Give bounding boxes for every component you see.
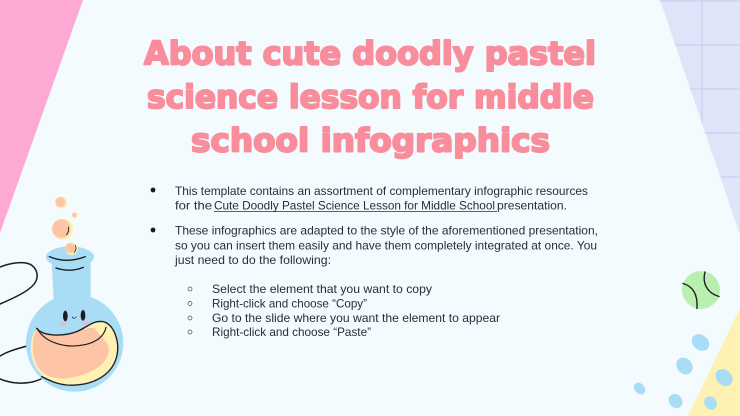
flask rim lines: [49, 257, 85, 270]
title: [144, 34, 596, 160]
lavender grid paper shape: [660, 0, 740, 235]
body text: first bullet: This template contains an assortment of complementary infographic resources: [175, 184, 588, 198]
icon: green tennis ball: [682, 271, 720, 309]
title: school infographics: [191, 122, 550, 160]
body text: sub-list of steps: [188, 282, 500, 339]
body text: sub-list of steps: Right-click and choose “Paste”: [212, 325, 371, 339]
body text: first bullet: Cute Doodly Pastel Science Lesson for Middle School: [214, 198, 495, 212]
icon: blue droplets: [631, 331, 736, 412]
bubbles: [52, 197, 78, 255]
face: [60, 310, 89, 325]
body text: second bullet: so you can insert them easily and have them completely integrated at once. You: [175, 238, 597, 252]
body text: sub-list of steps: Right-click and choose “Copy”: [212, 296, 367, 310]
title: About cute doodly pastel: [144, 34, 596, 72]
body text: sub-list of steps: Select the element that you want to copy: [212, 282, 432, 296]
liquid: [31, 321, 118, 385]
body text: first bullet: [151, 184, 588, 212]
pink corner shape: [0, 0, 83, 233]
yellow corner shape: [688, 308, 740, 416]
icon: doodle loops behind flask: [0, 263, 41, 383]
body text: second bullet: just need to do the following:: [174, 253, 331, 267]
body text: sub-list of steps: Go to the slide where you want the element to appear: [212, 311, 500, 325]
body text: first bullet: for the: [175, 198, 212, 212]
title: science lesson for middle: [147, 78, 594, 116]
icon: smiling flask character: [26, 197, 123, 392]
body text: second bullet: [151, 224, 598, 267]
body text: first bullet: presentation.: [497, 198, 567, 212]
body text: second bullet: These infographics are adapted to the style of the aforementioned presentation,: [175, 224, 598, 238]
flask glass: [26, 246, 123, 392]
